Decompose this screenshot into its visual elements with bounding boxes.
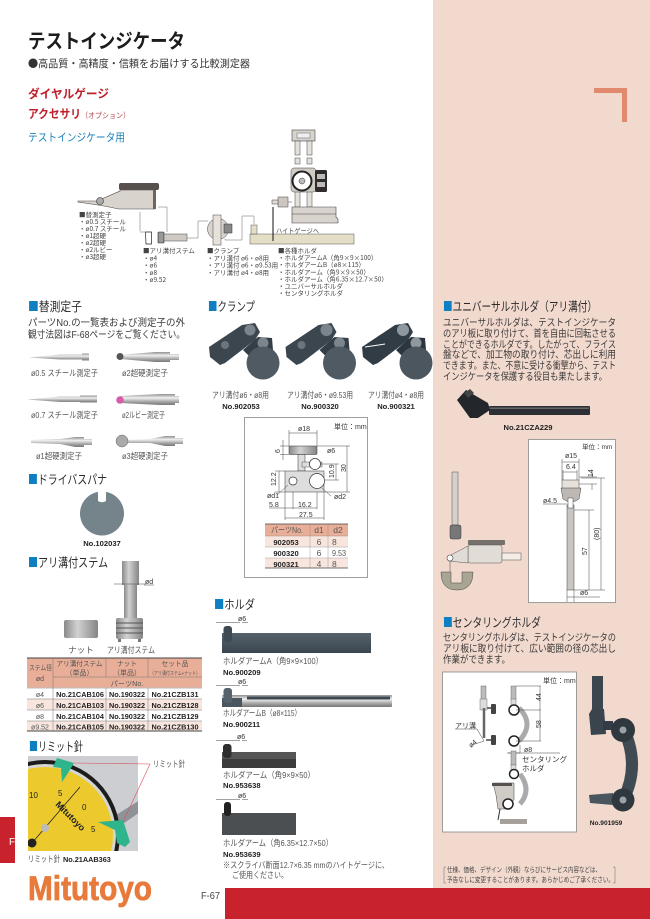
heading: centering holder: ■センタリングホルダ (443, 612, 541, 631)
part number: clamp 3: No.900321 (377, 402, 416, 411)
photo: clamp 1 (209, 323, 280, 380)
photo: dial with limit hands: 0 (82, 803, 87, 812)
text: styli note: パーツNo.の一覧表および測定子の外 (28, 316, 185, 329)
label: dovetail stems: ・ø9.52 (143, 274, 166, 284)
panel: right pink column (433, 0, 650, 919)
drawing: clamp dimensions: 902053 (273, 538, 299, 547)
label: arm A: ホルダアームA（角9×9×100） (223, 656, 323, 666)
table: stems: ø9.52 (31, 724, 49, 732)
photo: centering holder (589, 676, 635, 812)
text: universal holder description: ユニバーサルホルダは、テストインジケータ (443, 316, 616, 329)
dimension: d: ød (145, 579, 153, 586)
part number: No.102037 (83, 539, 121, 548)
table: stems: No.21CZB129 (151, 712, 199, 721)
stylus: 3 carbide (116, 435, 183, 447)
label: holders: ・ホルダアーム（角6.35×12.7×50） (278, 273, 388, 283)
drawing: clamp dimensions: 9.53 (332, 548, 346, 558)
drawing: clamp dimensions: ød1 (267, 493, 279, 500)
table: stems: No.190322 (109, 690, 145, 699)
drawing: clamp dimensions: パーツNo. (271, 525, 303, 535)
table: stems (27, 658, 202, 732)
table: stems: No.21CAB105 (56, 722, 104, 732)
label: clamps: ■クランプ (207, 245, 239, 255)
table: stems: No.190322 (109, 701, 145, 710)
label: to height gauge: ハイトゲージへ (276, 225, 319, 235)
stylus label: ø1超硬測定子 (36, 451, 82, 461)
icon: holder plate (250, 225, 354, 244)
stylus: 1 carbide (31, 437, 92, 447)
photo: arm D: ø6 (238, 793, 246, 800)
label: dovetail stems: ・ø4 (143, 252, 157, 262)
table: stems: ステム径 (29, 663, 52, 672)
photo: arm D (216, 793, 296, 835)
stylus label: ø0.5 スチール測定子 (31, 368, 98, 378)
heading: dial gauge: ダイヤルゲージ (28, 86, 109, 101)
system diagram (78, 130, 388, 298)
label: arm C: ホルダアーム（角9×9×50） (223, 770, 315, 780)
title: テストインジケータ (28, 30, 185, 53)
drawing: centering holder dimensions (442, 672, 576, 832)
drawing: clamp dimensions: 5.8 (269, 502, 279, 509)
table: stems: ød (36, 676, 44, 683)
photo: arm C: ø6 (237, 734, 245, 741)
photo: stem (116, 561, 143, 642)
stylus: 0.5 steel (29, 354, 89, 360)
heading: for test indicator: テストインジケータ用 (28, 131, 125, 144)
table: stems: No.190322 (109, 722, 145, 732)
part number: universal holder: No.21CZA229 (504, 423, 552, 432)
label: arm B: ホルダアームB（ø8×115） (223, 708, 301, 718)
drawing: clamp dimensions: ød2 (334, 494, 346, 501)
callout lines (74, 763, 150, 822)
table: stems: セット品 (162, 660, 188, 668)
drawing: centering holder dimensions: アリ溝 (455, 721, 476, 730)
photo: dial with limit hands: 5 (58, 789, 63, 798)
label: replacement styli: ・ø0.5 スチール (79, 216, 126, 226)
icon: dovetail stem (158, 232, 187, 243)
drawing: clamp dimensions: 8 (332, 559, 337, 569)
label: clamps: ・アリ溝付 ø4・ø8用 (207, 267, 269, 277)
part number: clamp 2: No.900320 (301, 402, 339, 411)
text line 6: インジケータを保護する役目も果たします。 (443, 370, 607, 383)
stylus label: ø0.7 スチール測定子 (31, 410, 98, 420)
label: clamp 2: アリ溝付ø6・ø9.53用 (287, 390, 353, 400)
photo: arm A: ø6 (238, 616, 246, 623)
table: stems: パーツNo. (110, 680, 144, 688)
table: stems: （単品） (113, 668, 141, 677)
label: replacement styli: ・ø1超硬 (79, 230, 107, 240)
heading: holder: ■ホルダ (214, 594, 255, 613)
photo: arm A (216, 616, 371, 653)
stylus label: ø3超硬測定子 (122, 451, 168, 461)
table: stems: No.21CAB106 (56, 690, 104, 699)
drawing: universal holder dimensions: (80) (594, 528, 601, 540)
table: stems: No.190322 (109, 712, 145, 721)
table: stems: No.21CAB104 (56, 712, 105, 721)
drawing: centering holder dimensions: 単位：mm (543, 676, 576, 685)
table: stems: No.21CZB130 (151, 722, 199, 732)
icon: height gauge (272, 130, 338, 223)
text line 2: アリ板に取り付けて、広い範囲の径の芯出し (443, 642, 616, 655)
text: styli note line 2: 観寸法図はF-68ページをご覧ください。 (28, 328, 185, 341)
label: dovetail stems: ・ø6 (143, 260, 157, 270)
label: holders: ■各種ホルダ (278, 245, 317, 255)
arrow: to height gauge (272, 207, 274, 241)
label: replacement styli: ・ø0.7 スチール (79, 223, 126, 233)
table: stems: （単品） (66, 668, 94, 677)
drawing: universal holder dimensions (528, 440, 616, 602)
table: stems: ø8 (36, 714, 44, 721)
table: stems: アリ溝付ステム (56, 659, 102, 668)
drawing: universal holder dimensions: ø6 (580, 590, 588, 597)
table: stems: ø6 (36, 703, 44, 710)
drawing: universal holder dimensions: ø15 (565, 453, 577, 460)
drawing: clamp dimensions: 900320 (273, 549, 299, 558)
corner mark (594, 90, 624, 122)
photo: arm C (216, 734, 296, 768)
label: dovetail stems: ・ø8 (143, 267, 157, 277)
panel: centering holder (442, 612, 635, 832)
icon: stylus spanner (146, 232, 152, 244)
drawing: clamp dimensions: 10.9 (329, 464, 336, 478)
icon: test indicator (78, 183, 159, 209)
drawing: clamp dimensions: 16.2 (298, 502, 312, 509)
table: stems: No.21CZB131 (151, 690, 199, 699)
stylus: 2 ruby (116, 394, 179, 405)
heading: clamp: ■クランプ (208, 296, 255, 315)
connector arrows (140, 207, 254, 240)
label: replacement styli: ■替測定子 (79, 209, 112, 219)
drawing: centering holder dimensions: 58 (536, 720, 543, 728)
label: clamp 1: アリ溝付ø6・ø8用 (212, 390, 269, 400)
label: replacement styli: ・ø2ルビー (79, 244, 113, 254)
label: replacement styli: ・ø3超硬 (79, 251, 107, 261)
photo: arm B (216, 679, 392, 707)
drawing: centering holder dimensions: 44 (536, 693, 543, 701)
part number: arm A: No.900209 (223, 668, 261, 677)
heading: dovetail stem: ■アリ溝付ステム (28, 552, 108, 571)
photo: universal holder (457, 389, 590, 418)
drawing: universal holder dimensions: ø4.5 (543, 498, 557, 505)
label: replacement styli: ・ø2超硬 (79, 237, 107, 247)
panel: spanner (28, 469, 124, 548)
photo: arm B: ø6 (238, 679, 246, 686)
drawing: clamp dimensions: 30 (341, 464, 348, 472)
heading: limit hand: ■リミット針 (29, 736, 83, 755)
drawing: clamp dimensions: ø6 (327, 448, 335, 455)
note: line 2: ご使用ください。 (232, 870, 288, 880)
panel: limit hand (28, 740, 185, 863)
part number: centering holder: No.901959 (590, 820, 623, 827)
tab: section F (0, 817, 15, 863)
heading: universal holder: ■ユニバーサルホルダ（アリ溝付） (443, 296, 597, 315)
table: stems: No.21CZB128 (151, 701, 199, 710)
panel: universal holder (441, 296, 616, 602)
heading: accessories (28, 107, 130, 121)
disclaimer (444, 865, 615, 884)
drawing: clamp dimensions: 900321 (273, 560, 299, 569)
illustration: holder in use (441, 472, 521, 590)
label: nut: ナット (68, 645, 94, 655)
table: stems: ø4 (36, 692, 44, 699)
table: stems: ナット (117, 660, 137, 668)
heading: accessories: アクセサリ (28, 107, 81, 121)
label: holders: ・ホルダアームB（ø8×115） (278, 259, 365, 269)
icon: spanner disc (80, 492, 124, 536)
drawing: universal holder dimensions: 57 (582, 547, 589, 555)
part number: arm C: No.953638 (223, 781, 261, 790)
text line 2: のアリ板に取り付けて、首を自由に回転させる (443, 327, 616, 340)
drawing: clamp dimensions (244, 418, 368, 578)
photo: dial with limit hands: 10 (29, 791, 38, 800)
drawing: universal holder dimensions: 6.4 (566, 464, 576, 471)
panel: holder (214, 594, 392, 880)
heading: spanner: ■ドライバスパナ (28, 469, 107, 488)
photo: dial with limit hands: 5 (91, 825, 96, 834)
panel: dovetail stem (27, 552, 202, 732)
disclaimer: 仕様、価格、デザイン（外観）ならびにサービス内容などは、 (447, 865, 601, 874)
label: arm D: ホルダアーム（角6.35×12.7×50） (223, 838, 333, 848)
footer red bar (225, 888, 650, 919)
drawing: universal holder dimensions: 14 (588, 469, 595, 477)
label: dovetail stems: ■アリ溝付ステム (143, 245, 195, 255)
label: holders: ・ホルダアーム（角9×9×50） (278, 266, 370, 276)
drawing: clamp dimensions: ø18 (298, 426, 310, 433)
panel: clamp (208, 296, 432, 578)
drawing: clamp dimensions: 単位：mm (334, 422, 367, 431)
photo: nut (64, 620, 98, 638)
drawing: clamp dimensions: 6 (317, 548, 322, 558)
table: stems: （アリ溝付ステム+ナット） (150, 669, 200, 677)
text: centering description: センタリングホルダは、テストインジケータの (443, 631, 616, 644)
note: scriber: ※スクライバ断面12.7×6.35 mmのハイトゲージに、 (223, 860, 389, 870)
drawing: clamp dimensions: 27.5 (299, 512, 313, 519)
photo: clamp 3 (362, 323, 432, 380)
stylus: 2 carbide (116, 352, 179, 362)
table: stems: No.21CAB103 (56, 701, 104, 710)
label: clamps: ・アリ溝付 ø6・ø8用 (207, 252, 269, 262)
stylus label: ø2超硬測定子 (122, 368, 168, 378)
photo: dial with limit hands (28, 756, 138, 851)
drawing: universal holder dimensions: 単位：mm (582, 442, 612, 451)
page number: F-67 (201, 891, 220, 902)
drawing: clamp dimensions: 8 (332, 537, 337, 547)
text line 3: 作業ができます。 (443, 653, 510, 666)
drawing: clamp dimensions: 4 (317, 559, 322, 569)
drawing: clamp dimensions: 6 (317, 537, 322, 547)
part number: clamp 1: No.902053 (222, 402, 260, 411)
heading: replacement styli: ■替測定子 (28, 296, 82, 315)
label: stem: アリ溝付ステム (107, 645, 155, 655)
label: holders: ・センタリングホルダ (278, 288, 344, 298)
caption: limit hand (28, 854, 111, 864)
drawing: clamp dimensions: d2 (333, 525, 343, 535)
tab: section F: F (9, 837, 15, 848)
drawing: clamp dimensions: 6 (275, 449, 282, 453)
part number: arm D: No.953639 (223, 850, 261, 859)
logo: Mitutoyo: Mitutoyo (28, 870, 152, 908)
label: clamps: ・アリ溝付 ø6・ø9.53用 (207, 260, 278, 270)
photo: dial with limit hands: Mitutoyo (54, 799, 88, 833)
dimension: d (114, 579, 154, 586)
icon: clamp (208, 215, 232, 245)
panel: replacement styli (27, 296, 185, 461)
drawing: clamp dimensions: d1 (314, 525, 324, 535)
caption: limit hand: リミット針 (28, 854, 60, 864)
callout label: リミット針 (153, 759, 185, 769)
drawing: centering holder dimensions: ø8 (524, 747, 532, 754)
part number: arm B: No.900211 (223, 720, 261, 729)
label: holders: ・ホルダアームA（角9×9×100） (278, 252, 377, 262)
label: holders: ・ユニバーサルホルダ (278, 280, 343, 290)
drawing: centering holder dimensions: センタリング (522, 754, 567, 764)
heading: accessories: （オプション） (81, 111, 130, 120)
text line 4: 盤などで、加工物の取り付け、芯出しに利用 (443, 348, 616, 361)
drawing: centering holder dimensions: ホルダ (522, 763, 545, 773)
drawing: centering holder dimensions: ø4 (468, 739, 479, 750)
stylus: 0.7 steel (27, 396, 97, 402)
photo: clamp 2 (286, 323, 356, 380)
drawing: clamp dimensions: 12.2 (271, 472, 278, 486)
stylus label: ø2ルビー測定子 (122, 410, 165, 420)
label: clamp 3: アリ溝付ø4・ø8用 (368, 390, 424, 400)
caption: limit hand: No.21AAB363 (63, 855, 111, 864)
subtitle: ●高品質・高精度・信頼をお届けする比較測定器 (28, 56, 250, 71)
